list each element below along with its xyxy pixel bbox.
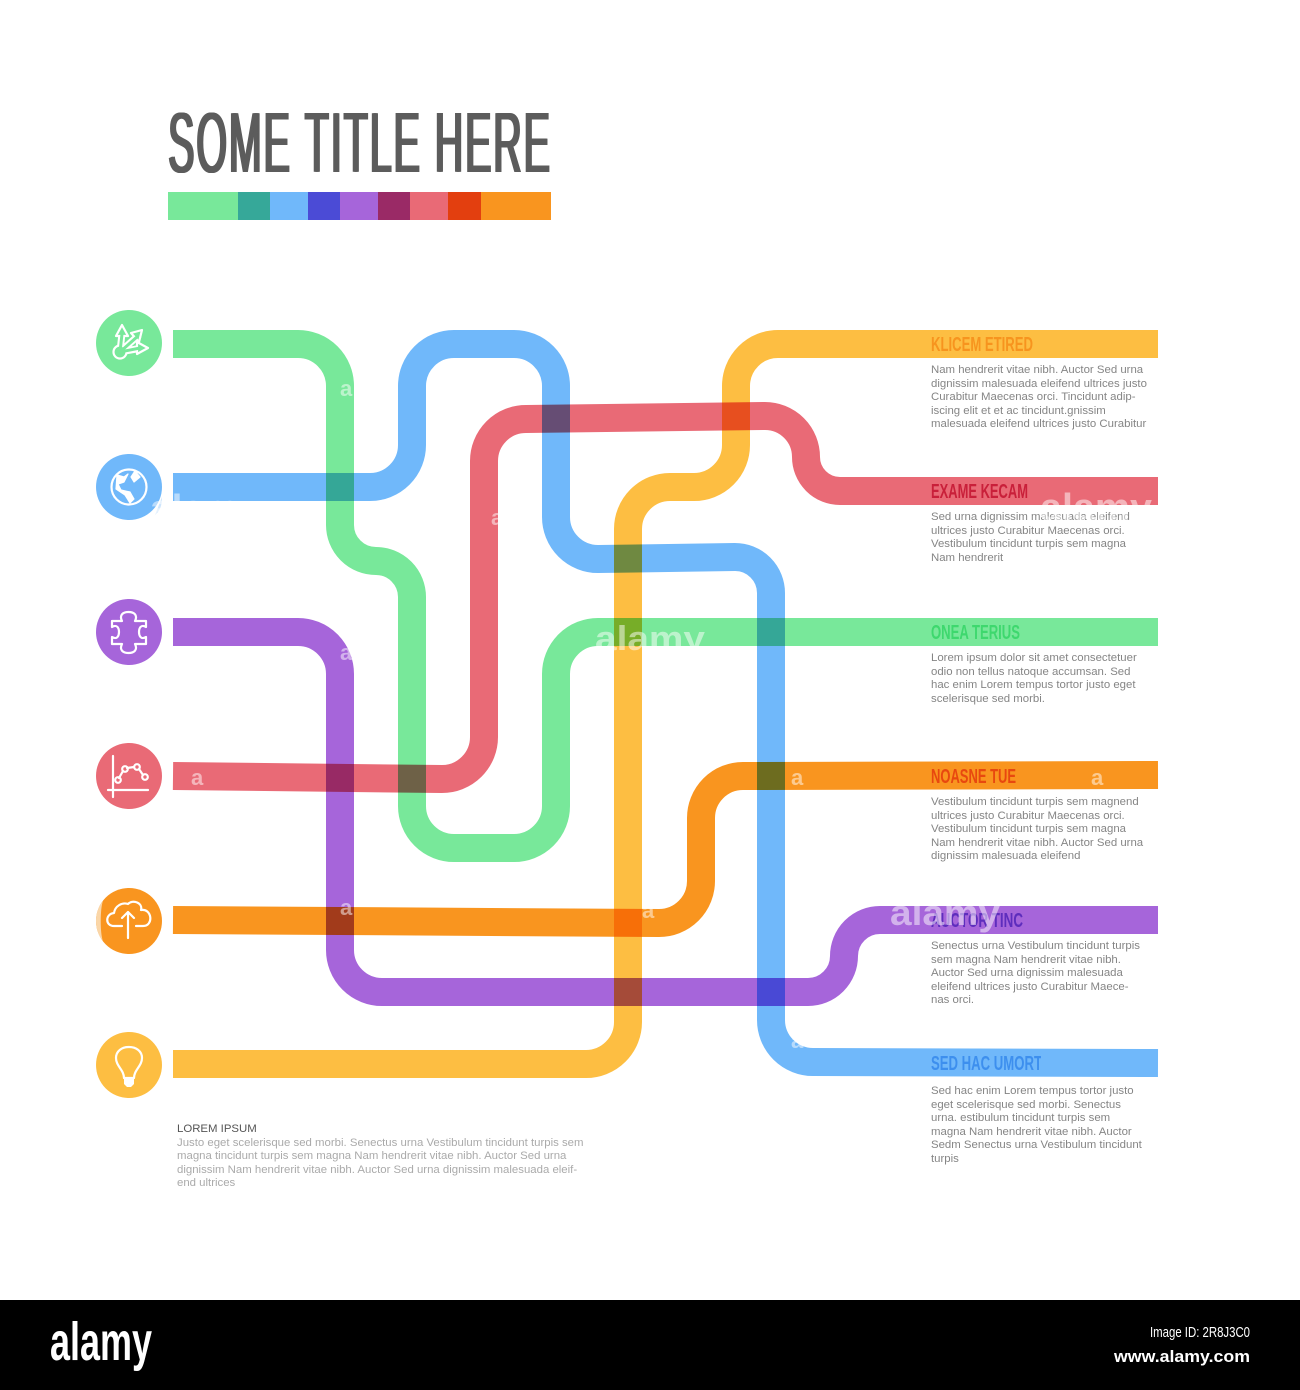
text: Sedm Senectus urna Vestibulum tincidunt — [931, 1139, 1142, 1151]
text: eleifend ultrices justo Curabitur Maece- — [931, 981, 1129, 993]
text block: lorem ipsum note: LOREM IPSUM — [177, 1123, 257, 1135]
line: orange route — [173, 775, 1158, 923]
text: dignissim malesuada eleifend ultrices justo — [931, 378, 1147, 390]
title colour bar — [168, 192, 551, 220]
line: blue route — [173, 344, 1158, 1063]
text: Nam hendrerit vitae nibh. Auctor Sed urna — [931, 364, 1143, 376]
text: turpis — [931, 1153, 959, 1165]
text: Vestibulum tincidunt turpis sem magnend — [931, 796, 1139, 808]
watermarks: a — [791, 765, 804, 790]
text: eget scelerisque sed morbi. Senectus — [931, 1099, 1121, 1111]
watermarks: a — [340, 895, 353, 920]
title: SOME TITLE HERE — [167, 96, 551, 191]
watermarks: alamy — [1040, 487, 1152, 529]
watermarks: a — [191, 765, 204, 790]
icon: globe on blue circle — [96, 454, 162, 520]
text: iscing elit et et ac tincidunt.gnissim — [931, 405, 1106, 417]
text: Curabitur Maecenas orci. Tincidunt adip- — [931, 391, 1136, 403]
text: ultrices justo Curabitur Maecenas orci. — [931, 810, 1125, 822]
text: ultrices justo Curabitur Maecenas orci. — [931, 525, 1125, 537]
watermarks: a — [491, 505, 504, 530]
text block: exame kecam — [931, 481, 1130, 564]
icon: arrows on green circle — [96, 310, 162, 376]
watermarks: alamy — [595, 620, 705, 658]
footer url: www.alamy.com — [1113, 1347, 1250, 1366]
text: Sed hac enim Lorem tempus tortor justo — [931, 1085, 1134, 1097]
text: sem magna Nam hendrerit vitae nibh. — [931, 954, 1121, 966]
text: hac enim Lorem tempus tortor justo eget — [931, 679, 1136, 691]
watermarks: alamy — [890, 892, 1000, 933]
footer logo: alamy — [50, 1312, 152, 1372]
text: magna Nam hendrerit vitae nibh. Auctor — [931, 1126, 1132, 1138]
text block: lorem ipsum note: end ultrices — [177, 1177, 235, 1189]
line: yellow route — [173, 344, 1158, 1064]
text: Senectus urna Vestibulum tincidunt turpis — [931, 940, 1140, 952]
watermarks: a — [791, 1028, 804, 1053]
text: odio non tellus natoque accumsan. Sed — [931, 666, 1130, 678]
watermarks: a — [1091, 765, 1104, 790]
icon: line chart on red circle — [96, 743, 162, 809]
icon: puzzle piece on purple circle — [96, 599, 162, 665]
text: Vestibulum tincidunt turpis sem magna — [931, 823, 1126, 835]
text: Nam hendrerit — [931, 552, 1003, 564]
text block: auctor tinc — [931, 910, 1140, 1006]
text block: lorem ipsum note — [177, 1123, 583, 1189]
text: Sed urna dignissim malesuada eleifend — [931, 511, 1130, 523]
text block: lorem ipsum note: magna tincidunt turpis sem magna Nam hendrerit vitae nibh. Auctor Sed urna — [177, 1150, 566, 1162]
watermarks: alamy — [150, 487, 260, 528]
route lines network — [173, 320, 1158, 1090]
watermarks: a — [642, 898, 655, 923]
text: Auctor Sed urna dignissim malesuada — [931, 967, 1123, 979]
text: dignissim malesuada eleifend — [931, 850, 1080, 862]
text: malesuada eleifend ultrices justo Curabitur — [931, 418, 1146, 430]
text block: lorem ipsum note: Justo eget scelerisque sed morbi. Senectus urna Vestibulum tincidunt turpis sem — [177, 1137, 583, 1149]
text: Nam hendrerit vitae nibh. Auctor Sed urna — [931, 837, 1143, 849]
text block: klicem etired — [931, 334, 1147, 430]
line: red route — [173, 416, 1158, 779]
watermarks: a — [340, 376, 353, 401]
text: Lorem ipsum dolor sit amet consectetuer — [931, 652, 1137, 664]
line: green route — [173, 344, 1158, 848]
icon: cloud upload on orange circle — [96, 888, 162, 954]
footer bar — [0, 1300, 1300, 1390]
text: Vestibulum tincidunt turpis sem magna — [931, 538, 1126, 550]
footer image id: Image ID: 2R8J3C0 — [1150, 1324, 1250, 1341]
icon: light bulb on yellow circle — [96, 1032, 162, 1098]
text block: onea terius — [931, 622, 1137, 705]
watermarks: a — [340, 640, 353, 665]
line: purple route — [173, 632, 1158, 992]
text: urna. estibulum tincidunt turpis sem — [931, 1112, 1110, 1124]
text: nas orci. — [931, 994, 974, 1006]
text: scelerisque sed morbi. — [931, 693, 1045, 705]
text block: sed hac umort — [931, 1053, 1142, 1165]
text block: lorem ipsum note: dignissim Nam hendrerit vitae nibh. Auctor Sed urna dignissim malesuada eleif- — [177, 1164, 577, 1176]
text block: noasne tue — [931, 766, 1144, 862]
